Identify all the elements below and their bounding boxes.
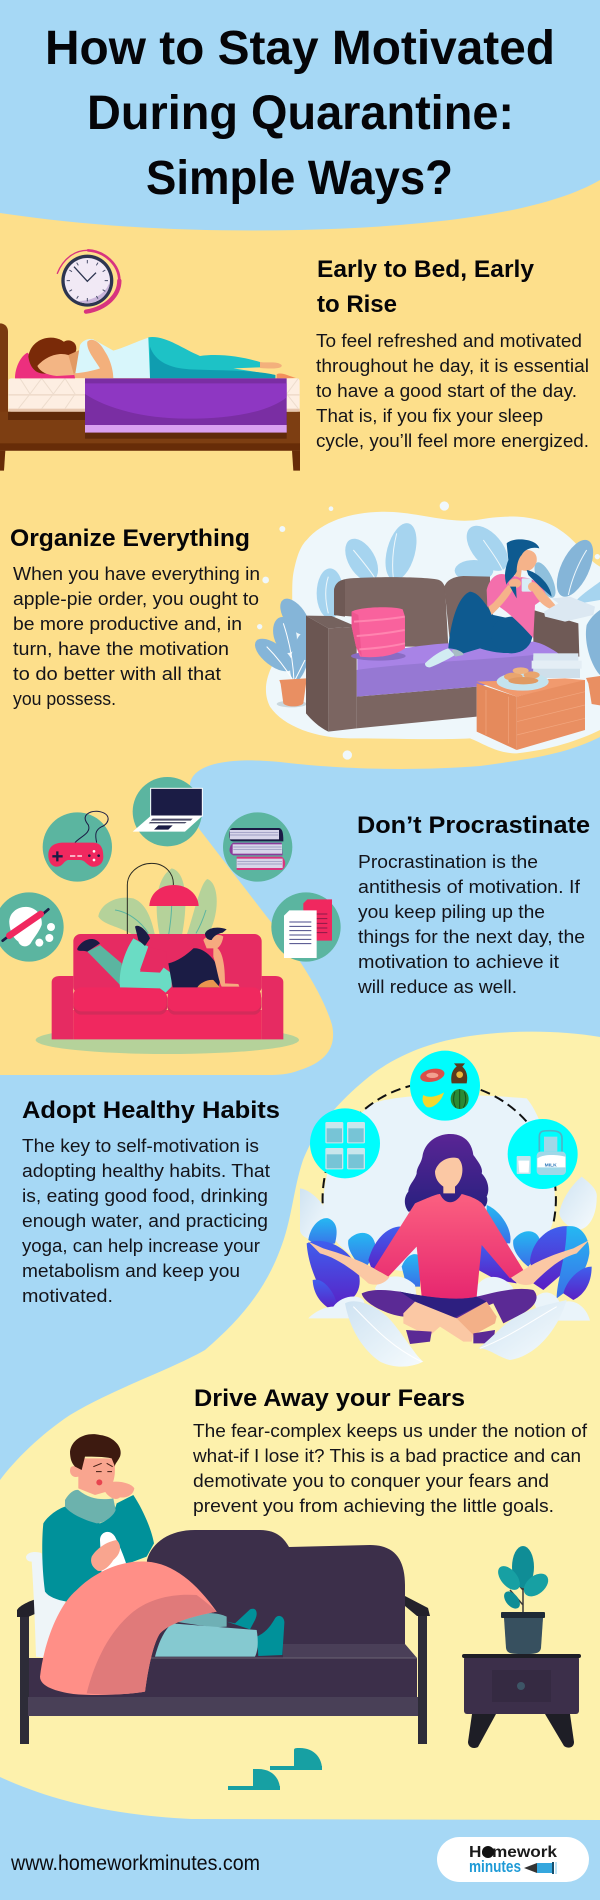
icon: milk: MILK (545, 1162, 557, 1168)
hand at chin (105, 1482, 134, 1499)
meditating woman (308, 1134, 589, 1344)
icon: slippers (228, 1748, 322, 1790)
body text: antithesis of motivation. If (358, 877, 581, 897)
pink blanket (40, 1561, 217, 1695)
body text: turn, have the motivation (13, 639, 229, 659)
floor lamp (127, 863, 199, 935)
body text: yoga, can help increase your (22, 1236, 260, 1256)
body text: metabolism and keep you (22, 1261, 240, 1281)
icon: milk (508, 1119, 578, 1189)
purple blanket (85, 378, 287, 439)
body text: adopting healthy habits. That (22, 1161, 270, 1181)
panel: early to bed illustration (0, 250, 300, 471)
book stack (532, 653, 582, 678)
man lying on sofa (77, 926, 239, 993)
background: yellow band (0, 180, 600, 1075)
panel: organize text (10, 525, 260, 709)
heading: Early to Bed, Early (317, 256, 535, 283)
icon: healthy food (410, 1051, 480, 1121)
pale backdrop disc (323, 1095, 555, 1273)
bed frame and headboard (0, 323, 300, 471)
pillow (15, 353, 75, 378)
pale mounds (308, 1276, 590, 1321)
legs and socks (155, 1609, 284, 1657)
icon: potted plant (494, 1546, 553, 1654)
body text: what-if I lose it? This is a bad practice and can (192, 1446, 581, 1466)
logo: minutes (469, 1857, 521, 1876)
icon: wall clock (57, 250, 119, 312)
body text: The fear-complex keeps us under the notion of (193, 1421, 588, 1441)
body text (357, 852, 585, 997)
heading: Drive Away your Fears (194, 1385, 465, 1412)
icon: rolling pin and dough (0, 892, 64, 962)
body text: apple-pie order, you ought to (13, 589, 259, 609)
blue plants left (307, 1218, 420, 1310)
decorative dots (257, 501, 600, 760)
heading: to Rise (317, 291, 397, 318)
logo (437, 1837, 589, 1882)
dashed ring (323, 1082, 556, 1223)
face and hair (70, 1434, 121, 1495)
wooden crate (477, 678, 585, 750)
body text (192, 1421, 588, 1516)
pink pillow (351, 607, 406, 661)
panel: healthy habits illustration (300, 1051, 597, 1367)
body text: will reduce as well. (357, 977, 517, 997)
background leaves (317, 518, 600, 675)
heading (317, 256, 535, 318)
body text: Procrastination is the (358, 852, 538, 872)
icon: stacked books (223, 812, 292, 882)
icon: documents (271, 892, 341, 962)
red sofa (52, 934, 283, 1039)
body text: enough water, and practicing (22, 1211, 268, 1231)
plate of cookies (497, 667, 549, 691)
woman reading with cup (425, 539, 557, 667)
panel: healthy habits text (22, 1097, 280, 1306)
brown sofa (306, 576, 579, 732)
tissue and hand (91, 1532, 127, 1575)
body text: throughout he day, it is essential (316, 356, 589, 376)
body text: to have a good start of the day. (316, 381, 577, 401)
blue plants right (478, 1205, 592, 1300)
title: During Quarantine: (87, 87, 514, 140)
heading: Organize Everything (10, 525, 250, 552)
scarf (65, 1490, 116, 1523)
open book on armrest (544, 597, 595, 622)
logo: Homework (469, 1844, 557, 1861)
body text: be more productive and, in (13, 614, 242, 634)
background: pale yellow band (0, 1032, 600, 1820)
title (45, 22, 555, 205)
body text: cycle, you’ll feel more energized. (316, 431, 589, 451)
pale side leaves (300, 1177, 597, 1243)
body text (22, 1136, 270, 1306)
background: blue blob (0, 737, 600, 1900)
body text: To feel refreshed and motivated (316, 331, 582, 351)
body text: you possess. (13, 689, 116, 709)
white blob backdrop (266, 512, 600, 753)
background plant (98, 868, 217, 937)
heading: Adopt Healthy Habits (22, 1097, 280, 1124)
ground shadow (36, 1026, 299, 1054)
body text: you keep piling up the (358, 902, 545, 922)
panel: organize illustration (250, 501, 600, 760)
title: How to Stay Motivated (45, 22, 555, 75)
body text: motivation to achieve it (358, 952, 559, 972)
pillow (26, 1552, 65, 1657)
icon: water glasses (310, 1108, 380, 1178)
heading: Don’t Procrastinate (357, 812, 590, 839)
sleeping woman (28, 337, 296, 378)
body text: things for the next day, the (358, 927, 585, 947)
left potted plant (250, 594, 316, 707)
body text: is, eating good food, drinking (22, 1186, 268, 1206)
panel: procrastinate illustration (0, 777, 341, 1054)
body text: demotivate you to conquer your fears and (193, 1471, 549, 1491)
panel: early to bed text (316, 256, 589, 451)
side table (462, 1654, 581, 1748)
pale foreground leaves (345, 1300, 567, 1367)
body text (316, 331, 589, 451)
dark sofa (17, 1530, 430, 1744)
body text: When you have everything in (13, 564, 260, 584)
body text: motivated. (22, 1286, 113, 1306)
title: Simple Ways? (146, 152, 453, 205)
body text (13, 564, 260, 709)
right pot (586, 676, 600, 705)
sweater (42, 1495, 154, 1602)
body text: prevent you from achieving the little goals. (193, 1496, 554, 1516)
body text: That is, if you fix your sleep (316, 406, 543, 426)
panel: procrastinate text (357, 812, 590, 997)
icon: game controller (43, 811, 112, 882)
mattress (8, 378, 300, 412)
icon: laptop (133, 777, 202, 846)
website url: www.homeworkminutes.com (10, 1852, 260, 1875)
body text: The key to self-motivation is (22, 1136, 259, 1156)
man under blanket (26, 1434, 284, 1695)
panel: fears text (192, 1385, 588, 1516)
body text: to do better with all that (13, 664, 221, 684)
